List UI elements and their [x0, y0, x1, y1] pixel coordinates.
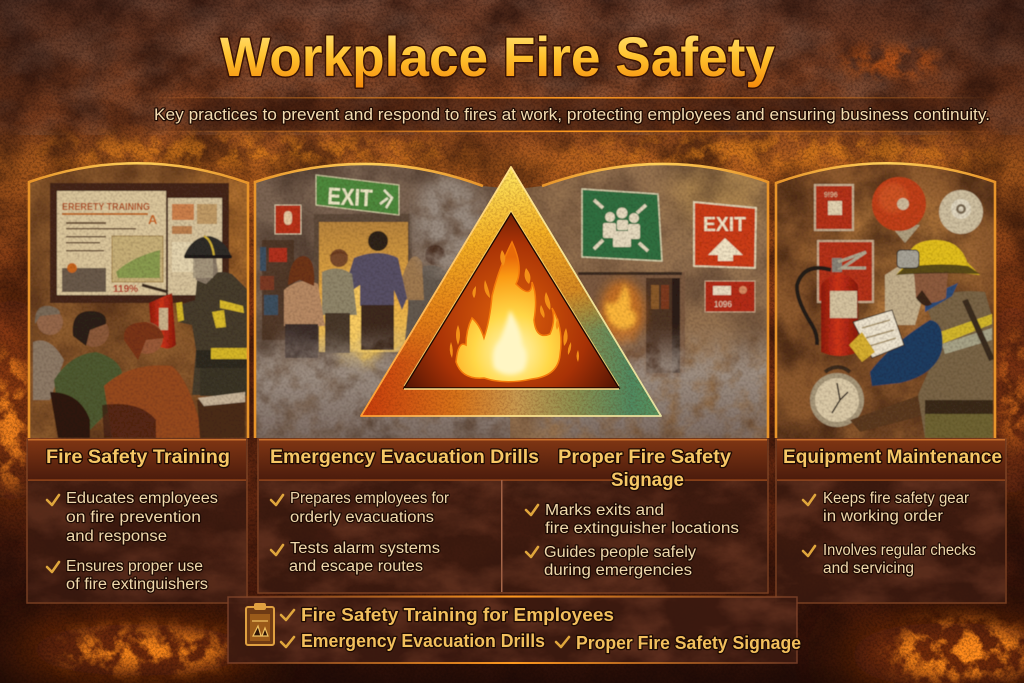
assembly point sign	[582, 189, 662, 261]
yellow hard hat	[896, 240, 980, 275]
red exit sign: EXIT	[703, 214, 746, 236]
panel: fire safety training text: Educates employees	[66, 490, 218, 507]
signage bullets: during emergencies	[544, 562, 692, 579]
panel: evacuation scene	[254, 162, 510, 438]
panel: summary checklist: Proper Fire Safety Signage	[576, 632, 801, 653]
signage bullets: Marks exits and	[545, 502, 664, 519]
clipboard and glove	[849, 310, 904, 362]
firefighter with extinguisher	[176, 236, 248, 396]
fire triangle emblem	[361, 167, 661, 416]
evacuation bullets: and escape routes	[289, 558, 423, 575]
panel: equipment maintenance scene	[776, 150, 995, 440]
smoke detector	[939, 190, 983, 234]
exit sign: EXIT	[327, 183, 373, 212]
panel: summary checklist: Emergency Evacuation Drills	[301, 630, 545, 651]
smoke clouds	[540, 330, 780, 442]
red exit sign	[694, 202, 756, 268]
panel: equipment maintenance text: in working order	[823, 508, 943, 525]
wall clipboard	[884, 266, 922, 326]
smoke clouds	[256, 329, 510, 438]
panel: fire safety training text	[27, 439, 247, 603]
panel: equipment maintenance text: Equipment Maintenance	[783, 447, 1002, 468]
burning corridor	[578, 272, 685, 377]
panel: signage scene	[510, 150, 780, 442]
extinguisher	[142, 285, 176, 349]
signage bullets: fire extinguisher locations	[545, 520, 739, 537]
training poster board: ERERETY TRAINING	[62, 201, 150, 213]
signage bullets: Guides people safely	[544, 544, 696, 561]
pull station	[815, 185, 853, 230]
exit sign	[316, 175, 399, 215]
title: Workplace Fire Safety	[220, 25, 775, 88]
panel: fire safety training text: Fire Safety Training	[46, 447, 230, 468]
panel: fire safety training text: on fire prevention	[66, 509, 201, 526]
evacuation bullets: Prepares employees for	[290, 490, 449, 507]
door with glow	[314, 214, 412, 370]
panel: equipment maintenance text	[776, 439, 1006, 603]
evacuation bullets	[271, 490, 449, 575]
training poster board: A	[148, 212, 158, 227]
evacuation bullets: orderly evacuations	[290, 509, 434, 526]
icon: clipboard	[246, 603, 274, 645]
panel: equipment maintenance text: and servicing	[823, 560, 914, 577]
subtitle band: Key practices to prevent and respond to fires at work, protecting employees and ensuring business continuity.	[154, 106, 990, 124]
panel: equipment maintenance text: Keeps fire safety gear	[823, 490, 969, 507]
heading: evacuation drills: Emergency Evacuation Drills	[270, 447, 539, 468]
small red notice: 1096	[714, 300, 732, 309]
subtitle band	[140, 97, 1000, 132]
audience: three seated people	[33, 306, 204, 438]
signage bullets	[526, 502, 739, 579]
heading: signage: Proper Fire Safety	[558, 447, 731, 468]
pocket watch gauge	[810, 367, 864, 427]
panel: fire safety training scene	[28, 162, 250, 438]
panel: summary checklist	[228, 596, 801, 664]
panel: summary checklist: Fire Safety Training for Employees	[301, 604, 614, 625]
evacuating people	[284, 231, 452, 358]
wall alarm box and shelves	[260, 205, 301, 340]
panel: fire safety training text: of fire extinguishers	[66, 576, 208, 593]
panel: equipment maintenance text: Involves regular checks	[823, 542, 976, 559]
tools pile	[850, 395, 925, 432]
training poster board: 119%	[113, 284, 138, 295]
panel: evacuation and signage text	[258, 439, 768, 593]
panel: fire safety training text: and response	[66, 528, 167, 545]
worker inspecting equipment	[870, 272, 993, 438]
alarm bell	[872, 177, 926, 243]
training poster board	[50, 183, 229, 303]
small red notice	[705, 281, 755, 312]
evacuation bullets: Tests alarm systems	[290, 540, 440, 557]
heading: signage	[558, 447, 731, 491]
panel: fire safety training text: Ensures proper use	[66, 558, 203, 575]
pull station: 9!96	[824, 192, 838, 199]
central flame	[450, 242, 579, 382]
heading: signage: Signage	[611, 470, 684, 491]
extinguisher and board	[797, 241, 873, 356]
